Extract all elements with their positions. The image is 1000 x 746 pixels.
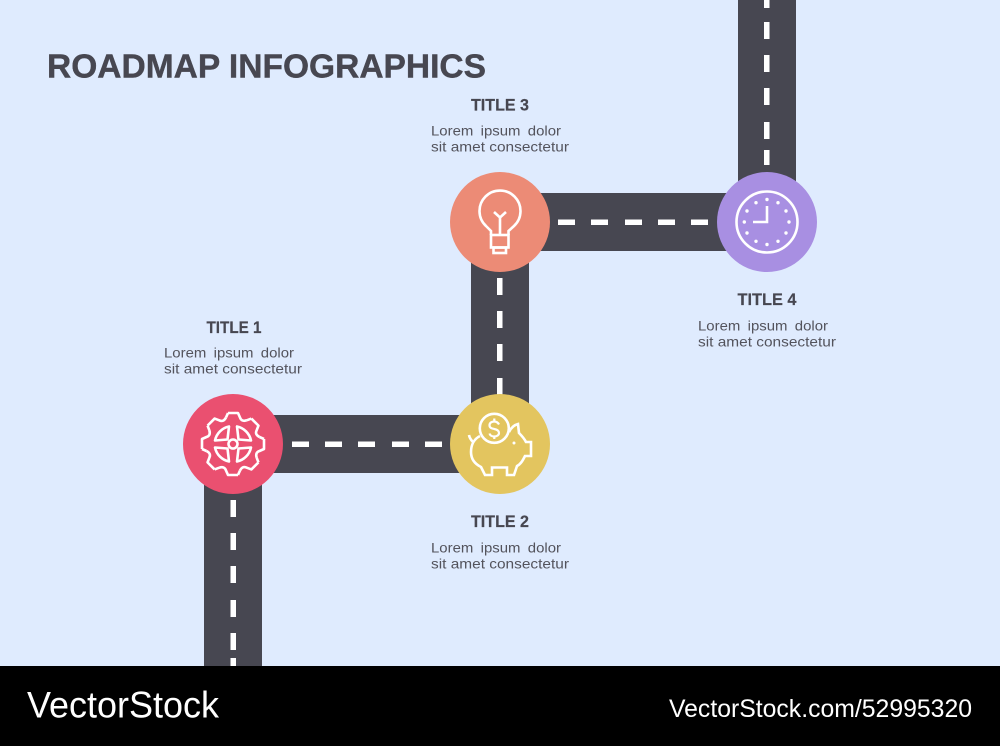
road centre dashes [230,0,770,666]
watermark bar [0,666,1000,746]
road [230,0,770,680]
icon: piggy bank [469,414,531,475]
text block: title 2: Lorem ipsum dolor [431,540,561,556]
text block: title 1: Lorem ipsum dolor [164,344,294,360]
text block: title 3: TITLE 3 [471,96,529,114]
text block: title 4: TITLE 4 [738,290,797,309]
text block: title 1: TITLE 1 [206,318,262,337]
milestone 2: piggy bank [450,394,550,494]
milestone 1: gear [183,394,283,494]
icon: clock [736,192,798,252]
text block: title 2: TITLE 2 [471,512,529,531]
text block: title 4: Lorem ipsum dolor [698,318,828,334]
title: ROADMAP INFOGRAPHICS [47,48,486,86]
milestone 3: light bulb [450,172,550,272]
text block: title 2: sit amet consectetur [431,556,569,572]
text block: title 2 [431,512,569,572]
text block: title 3 [431,96,569,154]
milestone 4: clock [717,172,817,272]
text block: title 3: sit amet consectetur [431,138,569,154]
watermark logo text: VectorStock [27,684,219,726]
icon: gear [201,412,265,476]
icon: light bulb [480,191,520,253]
text block: title 4: sit amet consectetur [698,334,836,350]
text block: title 1: sit amet consectetur [164,360,302,376]
watermark url: VectorStock.com/52995320 [669,695,972,723]
text block: title 3: Lorem ipsum dolor [431,122,561,138]
text block: title 1 [164,318,302,376]
text block: title 4 [698,290,836,350]
